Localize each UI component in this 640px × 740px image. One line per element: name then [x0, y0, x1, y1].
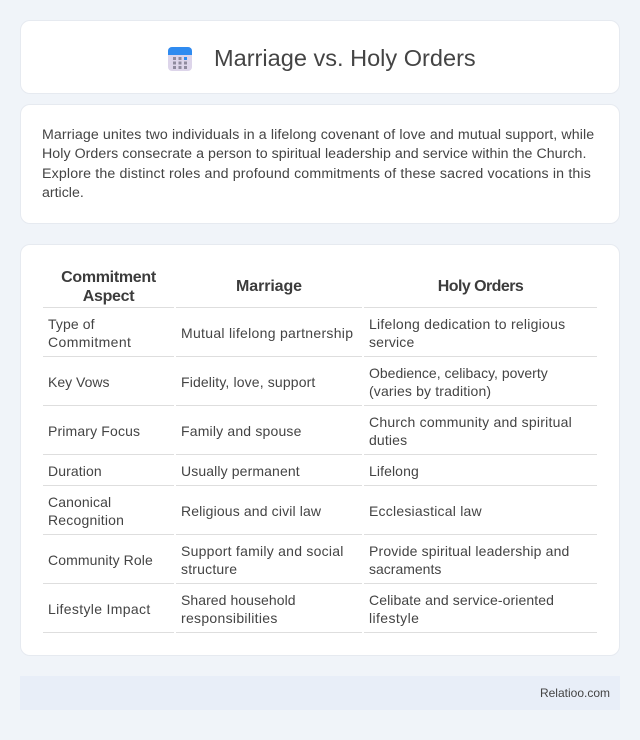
row: Canonical Recognition [48, 494, 124, 528]
cell: Support family and social [181, 543, 344, 559]
row: Primary Focus: Primary Focus [48, 423, 140, 439]
cell [181, 592, 296, 626]
row: Type of Commitment [48, 316, 131, 350]
cell: Religious and civil law [181, 503, 321, 519]
text block: introduction: Marriage unites two individuals in a lifelong covenant of love and mutual support, while [42, 127, 594, 143]
table header: Commitment Aspect: Aspect [83, 288, 134, 305]
row: Key Vows: Key Vows [48, 374, 109, 390]
icon: calendar [168, 47, 192, 71]
text block: introduction: article. [42, 185, 84, 201]
cell [369, 316, 565, 350]
panel: introduction [20, 104, 620, 224]
text block: introduction: Holy Orders consecrate a person to spiritual leadership and service within the Church. [42, 146, 586, 162]
table header: Holy Orders: Holy Orders [438, 278, 523, 295]
cell: service [369, 334, 414, 350]
cell: Lifelong [369, 463, 419, 479]
cell: Celibate and service-oriented [369, 592, 554, 608]
title: Marriage vs. Holy Orders [214, 45, 476, 71]
cell: Shared household [181, 592, 296, 608]
row: Duration: Duration [48, 463, 102, 479]
cell: sacraments [369, 561, 441, 577]
cell [369, 365, 548, 399]
panel: comparison table [20, 244, 620, 656]
footer [20, 676, 620, 710]
cell [369, 592, 554, 626]
cell: (varies by tradition) [369, 383, 491, 399]
cell: structure [181, 561, 237, 577]
cell: Church community and spiritual [369, 414, 572, 430]
row: Lifestyle Impact: Lifestyle Impact [48, 601, 151, 617]
row: Canonical Recognition: Canonical [48, 494, 111, 510]
panel: title card [20, 20, 620, 94]
cell: Fidelity, love, support [181, 374, 315, 390]
cell: Provide spiritual leadership and [369, 543, 569, 559]
cell: lifestyle [369, 610, 419, 626]
cell: Family and spouse [181, 423, 302, 439]
cell: responsibilities [181, 610, 278, 626]
footer credit: Relatioo.com [540, 686, 610, 700]
row: Type of Commitment: Type of [48, 316, 95, 332]
text block: introduction [42, 127, 594, 201]
cell: Mutual lifelong partnership [181, 325, 353, 341]
cell: Ecclesiastical law [369, 503, 482, 519]
cell: Lifelong dedication to religious [369, 316, 565, 332]
cell [369, 543, 569, 577]
table header: Commitment Aspect [61, 269, 156, 305]
row: Canonical Recognition: Recognition [48, 512, 124, 528]
row: Community Role: Community Role [48, 552, 153, 568]
cell: duties [369, 432, 407, 448]
cell [369, 414, 572, 448]
cell: Usually permanent [181, 463, 300, 479]
row: Type of Commitment: Commitment [48, 334, 131, 350]
cell [181, 543, 344, 577]
cell: Obedience, celibacy, poverty [369, 365, 548, 381]
text block: introduction: Explore the distinct roles and profound commitments of these sacred vocations in this [42, 166, 591, 182]
table header: Marriage: Marriage [236, 278, 302, 295]
table header: Commitment Aspect: Commitment [61, 269, 156, 286]
